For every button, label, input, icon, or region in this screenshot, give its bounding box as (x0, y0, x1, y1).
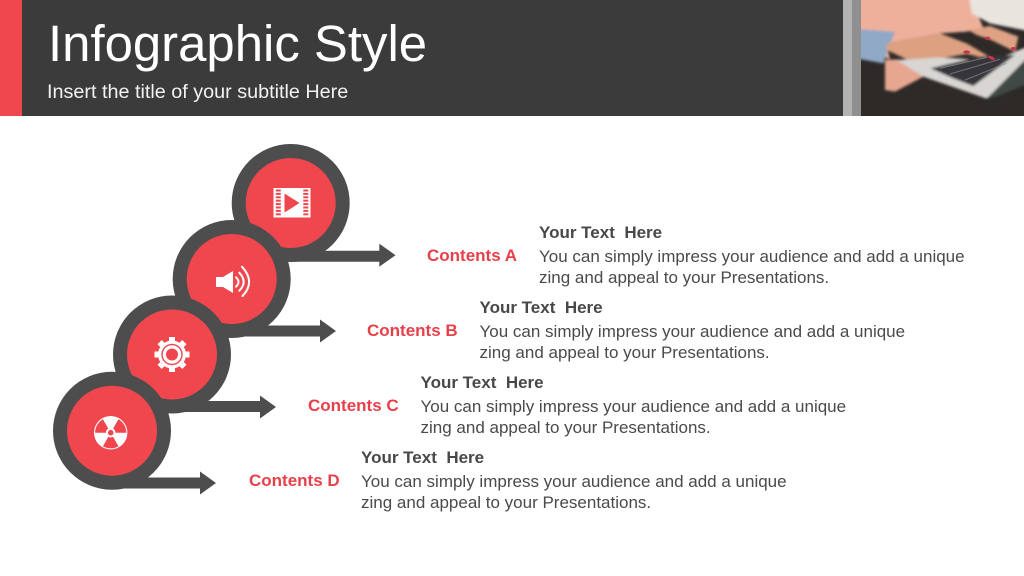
header band (0, 0, 1024, 116)
icon: gear (154, 337, 190, 372)
heading A: Your Text Here (539, 223, 662, 242)
body B: zing and appeal to your Presentations. (480, 342, 770, 362)
red accent bar (0, 0, 22, 116)
label: Contents C: Contents C (308, 396, 399, 415)
title: Infographic Style (48, 15, 427, 72)
subtitle: Insert the title of your subtitle Here (47, 80, 348, 102)
text block B (480, 298, 905, 362)
circle B with speaker icon (173, 220, 291, 338)
icon: radiation (94, 416, 127, 449)
arrow A (290, 244, 396, 267)
label: Contents B: Contents B (367, 321, 458, 340)
circle D with radiation icon (53, 372, 171, 490)
text block A (539, 223, 965, 286)
body C (420, 397, 846, 436)
body D (361, 472, 787, 512)
infographic diagram: stacked circles and arrows (53, 144, 396, 494)
arrow C (172, 396, 276, 418)
arrow D (112, 472, 216, 494)
body B: You can simply impress your audience and add a unique (480, 322, 905, 341)
body A: zing and appeal to your Presentations. (539, 268, 829, 286)
body D: zing and appeal to your Presentations. (361, 492, 651, 512)
arrow B (231, 320, 336, 342)
circle A with film icon (232, 144, 350, 262)
photo: hands typing on a laptop (843, 0, 1024, 116)
icon: speaker (216, 267, 249, 296)
body D: You can simply impress your audience and add a unique (361, 472, 787, 491)
text block D (361, 448, 787, 512)
heading C: Your Text Here (420, 373, 544, 392)
heading B: Your Text Here (480, 298, 603, 317)
body A (539, 247, 965, 286)
body C: zing and appeal to your Presentations. (420, 418, 711, 436)
circle C with gear icon (113, 296, 231, 414)
text block C (420, 373, 846, 436)
body A: You can simply impress your audience and add a unique (539, 247, 965, 266)
label: Contents A: Contents A (427, 246, 517, 265)
heading D: Your Text Here (361, 448, 484, 467)
body C: You can simply impress your audience and add a unique (420, 397, 846, 416)
body B (480, 322, 905, 362)
label: Contents D: Contents D (249, 471, 340, 490)
icon: film play (274, 188, 310, 218)
